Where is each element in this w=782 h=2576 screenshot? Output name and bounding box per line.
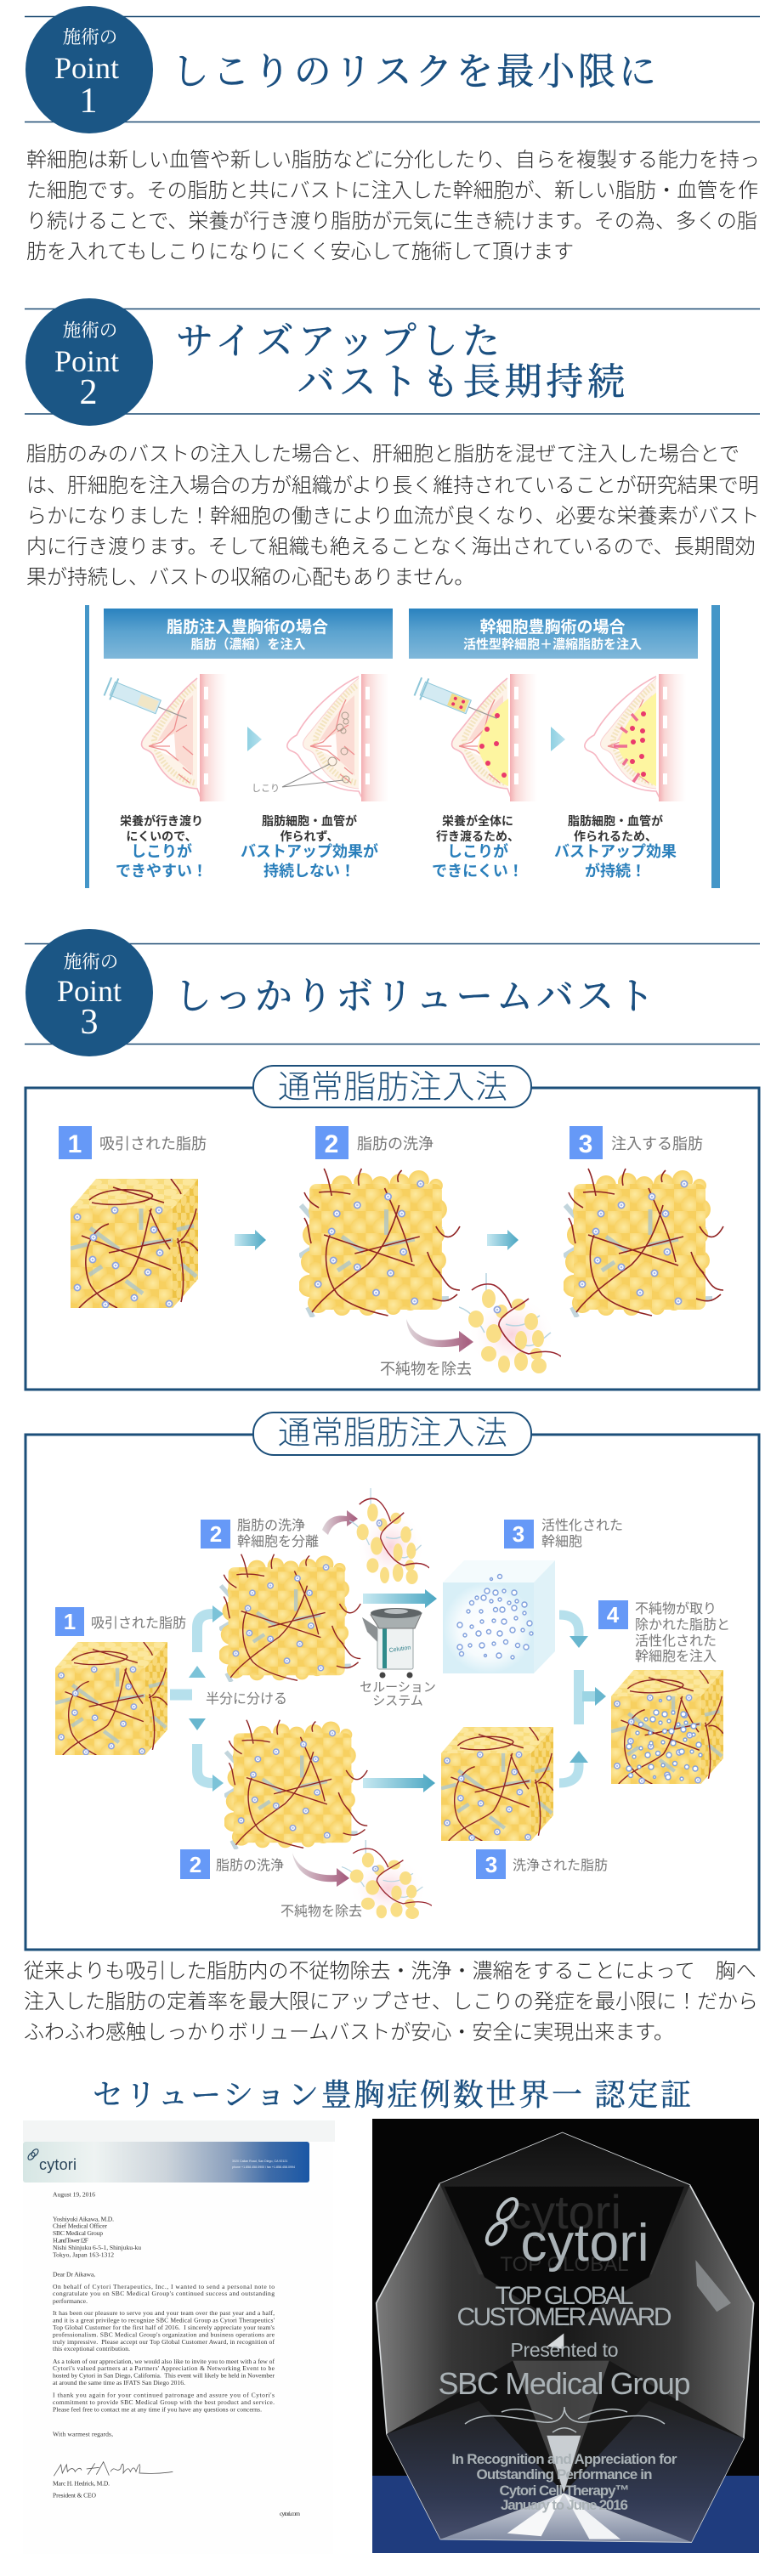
heading: point 2: バストも長期持続 [298,361,625,403]
body text 3: 従来よりも吸引した脂肪内の不従物除去・洗浄・濃縮をすることによって 胸へ [24,1960,756,1983]
step 3: 3 [579,1130,592,1158]
letter body: Yoshiyuki Aikawa, M.D. [53,2215,114,2223]
machine label [360,1680,436,1708]
panel header: stem cell injection: 幹細胞豊胸術の場合 [479,617,626,637]
machine label: セルーション [360,1680,436,1695]
washed fat top [218,1554,360,1682]
point badge 2: Point [54,344,119,378]
arrow to washed fat [363,1774,435,1792]
caption 1: 栄養が行き渡り [120,814,203,828]
final injected cube [611,1670,723,1784]
arrow [235,1230,266,1250]
step 3 bottom: 洗浄された脂肪 [513,1858,608,1873]
step 4: 4 [607,1602,620,1628]
letter body: With warmest regards, [53,2431,113,2437]
step 3 bottom: 3 [485,1852,497,1877]
caption 4: が持続！ [585,862,646,880]
heading: point 2: サイズアップした [176,320,500,362]
caption 2: バストアップ効果が [241,842,378,860]
caption 2 [241,814,378,880]
letter body: Please feel free to contact me at any time if you have any questions or concerns. [53,2405,262,2414]
letter body: SBC Medical Group [53,2229,103,2237]
step 2 top [201,1518,319,1549]
step 2 top: 幹細胞を分離 [237,1534,319,1549]
panel header: fat injection: 脂肪注入豊胸術の場合 [167,617,328,637]
caption 1: できやすい！ [116,863,207,880]
heading: point 3: しっかりボリュームバスト [174,976,654,1017]
Celution machine [362,1608,422,1678]
letter body: Marc H. Hedrick, M.D. [53,2480,110,2487]
step 4 [598,1600,730,1664]
step 2 [315,1126,434,1159]
point badge 2: 2 [80,373,97,412]
caption 2: 脂肪細胞・血管が [262,814,357,828]
body text 3 [24,1960,758,2044]
step 2 top: 2 [210,1521,222,1547]
fat cube [55,1642,167,1755]
panel header: fat injection [104,609,393,659]
body text 2 [26,443,760,589]
arrow to ice cube [363,1589,437,1608]
step 1: 1 [64,1609,76,1634]
caption 4 [554,814,677,880]
step 3 [570,1126,703,1159]
step 1 [59,1126,207,1159]
point badge 3: 3 [80,1003,99,1042]
award title: CUSTOMER AWARD [457,2303,672,2331]
body text 2: 内に行き渡ります。そして組織も絶えることなく海出されているので、長期間効 [26,535,756,558]
washed fat bottom [224,1720,367,1849]
caption 3: できにくい！ [432,863,524,880]
Celution machine: Celution [388,1645,411,1654]
caption 4: バストアップ効果 [554,843,677,860]
panel title pill [253,1413,531,1455]
impurity cluster [459,1273,561,1373]
arrow [247,727,262,751]
caption 3: しこりが [447,842,508,860]
step 4: 活性化された [635,1633,717,1649]
letter body: commitment to provide SBC Medical Group with the best product and service. [53,2398,275,2406]
step 3 top: 活性化された [541,1518,623,1533]
letter body: Tokyo, Japan 163-1312 [53,2250,114,2259]
step 2: 2 [325,1130,338,1158]
illustration: breast with syringe, fat only [104,674,227,801]
body text 3: 注入した脂肪の定着率を最大限にアップさせ、しこりの発症を最小限に！だから [24,1990,758,2013]
letterhead: phone +1.858.458.0900 / fax +1.858.458.0994 [232,2166,295,2169]
impurity label bottom: 不純物を除去 [280,1904,362,1919]
panel header: stem cell injection [409,609,698,659]
letter body: performance. [53,2297,88,2305]
letter body: Top Global Customer for the first half of 2016. I sincerely appreciate your team's [53,2324,275,2331]
step 4: 幹細胞を注入 [635,1649,717,1664]
caption 3: 栄養が全体に [442,814,513,828]
recognition text [452,2451,677,2513]
split arrows [170,1605,224,1792]
point badge 1: 1 [80,82,97,121]
illustration: breast with syringe, stem cells [414,674,537,801]
impurity arrow top [322,1510,358,1535]
arrow [551,727,565,751]
step 3 top: 幹細胞 [541,1534,582,1549]
panel header: stem cell injection: 活性型幹細胞＋濃縮脂肪を注入 [463,637,642,652]
body text 1: た細胞です。その脂肪と共にバストに注入した幹細胞が、新しい脂肪・血管を作 [26,179,758,202]
ghost reflections: TOP GLOBAL [500,2253,629,2276]
ghost reflections [500,2185,629,2276]
body text 2: 脂肪のみのバストの注入した場合と、肝細胞と脂肪を混ぜて注入した場合とで [26,443,740,466]
step 1: 吸引された脂肪 [91,1616,186,1631]
recipient: SBC Medical Group [439,2366,690,2401]
panel header: fat injection: 脂肪（濃縮）を注入 [190,637,306,652]
letter body: Chief Medical Officer [53,2222,107,2230]
letter body: this exceptional contribution. [53,2345,130,2352]
caption 3: 行き渡るため、 [436,829,519,843]
header rules [25,17,760,122]
point badge 1 [26,6,153,133]
step 4: 不純物が取り [635,1601,717,1616]
washed fat 2 [298,1169,460,1317]
letter body: I-Land Tower 12F [53,2237,88,2244]
certificate heading: セリューション豊胸症例数世界一 認定証 [93,2078,691,2112]
section 3: point 3 [23,929,760,2554]
arrow [487,1230,518,1250]
signature [54,2462,173,2476]
letter body: cytori.com [280,2510,300,2517]
letter body: professionalism. SBC Medical Group's organization and business operations are [53,2330,275,2339]
caption 4: 作られるため、 [574,829,657,843]
award photo [372,2119,759,2553]
panel title pill: 通常脂肪注入法 [278,1416,507,1452]
section 2: point 2 [25,298,760,888]
impurity arrow bottom [292,1853,349,1887]
body text 1: 幹細胞は新しい血管や新しい脂肪などに分化したり、自らを複製する能力を持っ [26,149,760,172]
caption 2: 作られず、 [280,829,339,843]
impurity arrow [406,1319,473,1352]
step 3: 注入する脂肪 [611,1135,703,1152]
section 1: point 1 [25,6,760,263]
machine label: システム [372,1694,423,1708]
body text 1 [26,149,760,263]
caption 1: しこりが [131,842,192,860]
letter body: As a token of our appreciation, we would also like to invite you to meet with a few of [53,2358,275,2365]
comparison diagram [85,605,720,888]
activated stem cell cube [443,1560,555,1673]
letter body: Nishi Shinjuku 6-5-1, Shinjuku-ku [53,2244,141,2251]
step 3 top [504,1518,623,1549]
letter body: President & CEO [53,2492,97,2499]
heading: point 1: しこりのリスクを最小限に [172,51,656,93]
letter body: Dear Dr Aikawa, [53,2271,95,2278]
merge arrow [579,1670,606,1724]
arrow up [559,1751,588,1783]
letter body: It has been our pleasure to serve you and your team over the past year and a half, [53,2309,275,2317]
header rules [25,309,760,414]
recognition text: January to June 2016 [501,2497,628,2513]
letterhead: cytori [39,2156,76,2173]
step 2: 脂肪の洗浄 [357,1135,434,1152]
panel: Celution method [26,1413,759,1950]
ghost reflections: cytori [507,2185,621,2239]
illustration: breast with lumps: しこり [252,783,280,794]
illustration: breast with new fat and vessels [585,674,686,801]
letter body: at around the same time as IFATS San Diego 2016. [53,2379,185,2386]
body text 2: らかになりました！幹細胞の働きにより血流が良くなり、必要な栄養素がバスト [26,505,760,528]
letter body: truly impressive. Please accept our Top Global Customer Award, in recognition of [53,2338,275,2346]
body text 1: り続けることで、栄養が行き渡り脂肪が元気に生き続けます。その為、多くの脂 [26,210,757,233]
letter body: I thank you again for your continued patronage and assure you of Cytori's [53,2392,275,2398]
engraved logo [483,2195,649,2273]
presented to: Presented to [510,2339,619,2361]
point badge 1: 施術の [63,27,117,48]
step 2 bottom: 脂肪の洗浄 [216,1858,284,1873]
step 1: 1 [68,1130,82,1158]
recognition text: In Recognition and Appreciation for [452,2451,677,2467]
letter body: Cytori's valued partners at a Partners' Appreciation & Networking Event to be [53,2364,275,2372]
crystal facets [377,2132,754,2542]
letter body [53,2191,300,2517]
header rules [25,943,760,1044]
letterhead: 3020 Callan Road, San Diego, CA 92121 [232,2160,287,2163]
heading: point 2 [176,320,625,403]
fat cube 1 [71,1179,198,1308]
award title [457,2282,672,2331]
engraved logo: cytori [520,2214,649,2273]
step 3 top: 3 [513,1521,524,1547]
washed fat cube [441,1727,553,1841]
body text 2: 果が持続し、バストの収縮の心配もありません。 [26,566,474,589]
step 2 top: 脂肪の洗浄 [237,1518,305,1533]
recognition text: Outstanding Performance in [476,2466,653,2483]
letter body: hosted by Cytori in San Diego, California. This event will likely be held in November [53,2371,275,2380]
step 1: 吸引された脂肪 [99,1135,207,1152]
caption 3 [432,814,524,880]
arrow down [559,1615,588,1648]
award title: TOP GLOBAL [495,2282,634,2310]
step 2 bottom: 2 [190,1852,201,1877]
body text 1: 肪を入れてもしこりになりにくく安心して施術して頂けます [26,241,574,263]
letter body: congratulate you on SBC Medical Group's continued success and outstanding [53,2290,275,2297]
letter body: August 19, 2016 [53,2191,95,2198]
point badge 2 [26,298,153,426]
split label: 半分に分ける [206,1691,287,1707]
point badge 3 [26,929,153,1056]
step 2 bottom [180,1849,284,1879]
recognition text: Cytori Cell Therapy™ [500,2483,629,2499]
point badge 3: 施術の [64,952,118,972]
step 1 [55,1607,186,1636]
impurity cluster top [349,1488,429,1584]
certificate letter [23,2120,335,2554]
impurity label: 不純物を除去 [380,1361,472,1378]
step 3 bottom [476,1849,608,1879]
point badge 3: Point [57,974,122,1008]
caption 2: 持続しない！ [264,862,355,880]
letter body: and it is a great privilege to recognize SBC Medical Group as Cytori Therapeutics' [53,2317,275,2324]
impurity cluster bottom [342,1840,432,1919]
panel title pill: 通常脂肪注入法 [278,1070,507,1106]
caption 1 [116,814,207,880]
step 4: 除かれた脂肪と [635,1617,730,1633]
caption 1: にくいので、 [126,829,197,843]
point badge 2: 施術の [63,320,117,341]
point badge 1: Point [54,51,119,85]
panel: conventional fat injection [26,1066,759,1390]
caption 4: 脂肪細胞・血管が [568,814,663,828]
letter body: On behalf of Cytori Therapeutics, Inc., I wanted to send a personal note to [53,2283,275,2290]
injected fat 3 [563,1169,723,1317]
letterhead [23,2142,309,2183]
illustration: breast with lumps [252,674,388,801]
body text 2: は、肝細胞を注入場合の方が組織がより長く維持されていることが研究結果で明 [26,474,759,497]
table [372,2476,759,2553]
body text 3: ふわふわ感触しっかりボリュームバストが安心・安全に実現出来ます。 [24,2021,674,2044]
ornament [465,2407,665,2432]
